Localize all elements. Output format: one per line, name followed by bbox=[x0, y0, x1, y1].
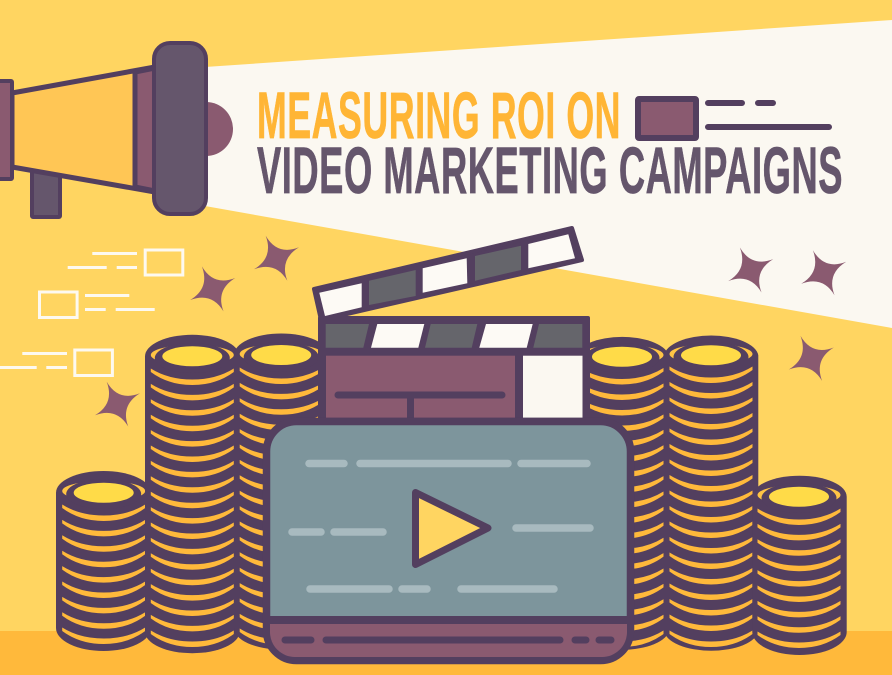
coin stack: far left bbox=[56, 471, 151, 651]
icon: megaphone bbox=[0, 43, 233, 217]
megaphone handle bbox=[32, 165, 60, 217]
play button bbox=[416, 492, 488, 564]
ground strip bbox=[0, 631, 892, 675]
megaphone cone collar bbox=[135, 68, 155, 191]
video player frame bbox=[266, 422, 630, 660]
coin stack: behind right bbox=[575, 337, 669, 650]
clapper top stick bbox=[314, 228, 582, 320]
coin stack: tall left bbox=[145, 335, 240, 653]
coin stack: tall right bbox=[664, 336, 758, 651]
video placeholder lines bbox=[292, 464, 590, 589]
clapper body bbox=[318, 316, 590, 426]
motion frames and lines bbox=[0, 250, 183, 376]
icon: small video with lines bbox=[638, 99, 829, 138]
title bbox=[257, 78, 843, 207]
megaphone cone bbox=[12, 67, 155, 192]
video control bar bbox=[270, 624, 627, 657]
coin stack: behind left bbox=[234, 334, 329, 650]
megaphone front rim bbox=[154, 43, 206, 214]
megaphone speaker dome bbox=[179, 102, 233, 156]
coin stack: far right bbox=[752, 476, 847, 655]
megaphone light beam bbox=[205, 20, 892, 328]
clapperboard bbox=[314, 228, 590, 426]
control bar lines bbox=[285, 636, 611, 644]
sparkle stars bbox=[95, 236, 846, 427]
megaphone back cap bbox=[0, 81, 12, 179]
video player bbox=[266, 422, 630, 660]
